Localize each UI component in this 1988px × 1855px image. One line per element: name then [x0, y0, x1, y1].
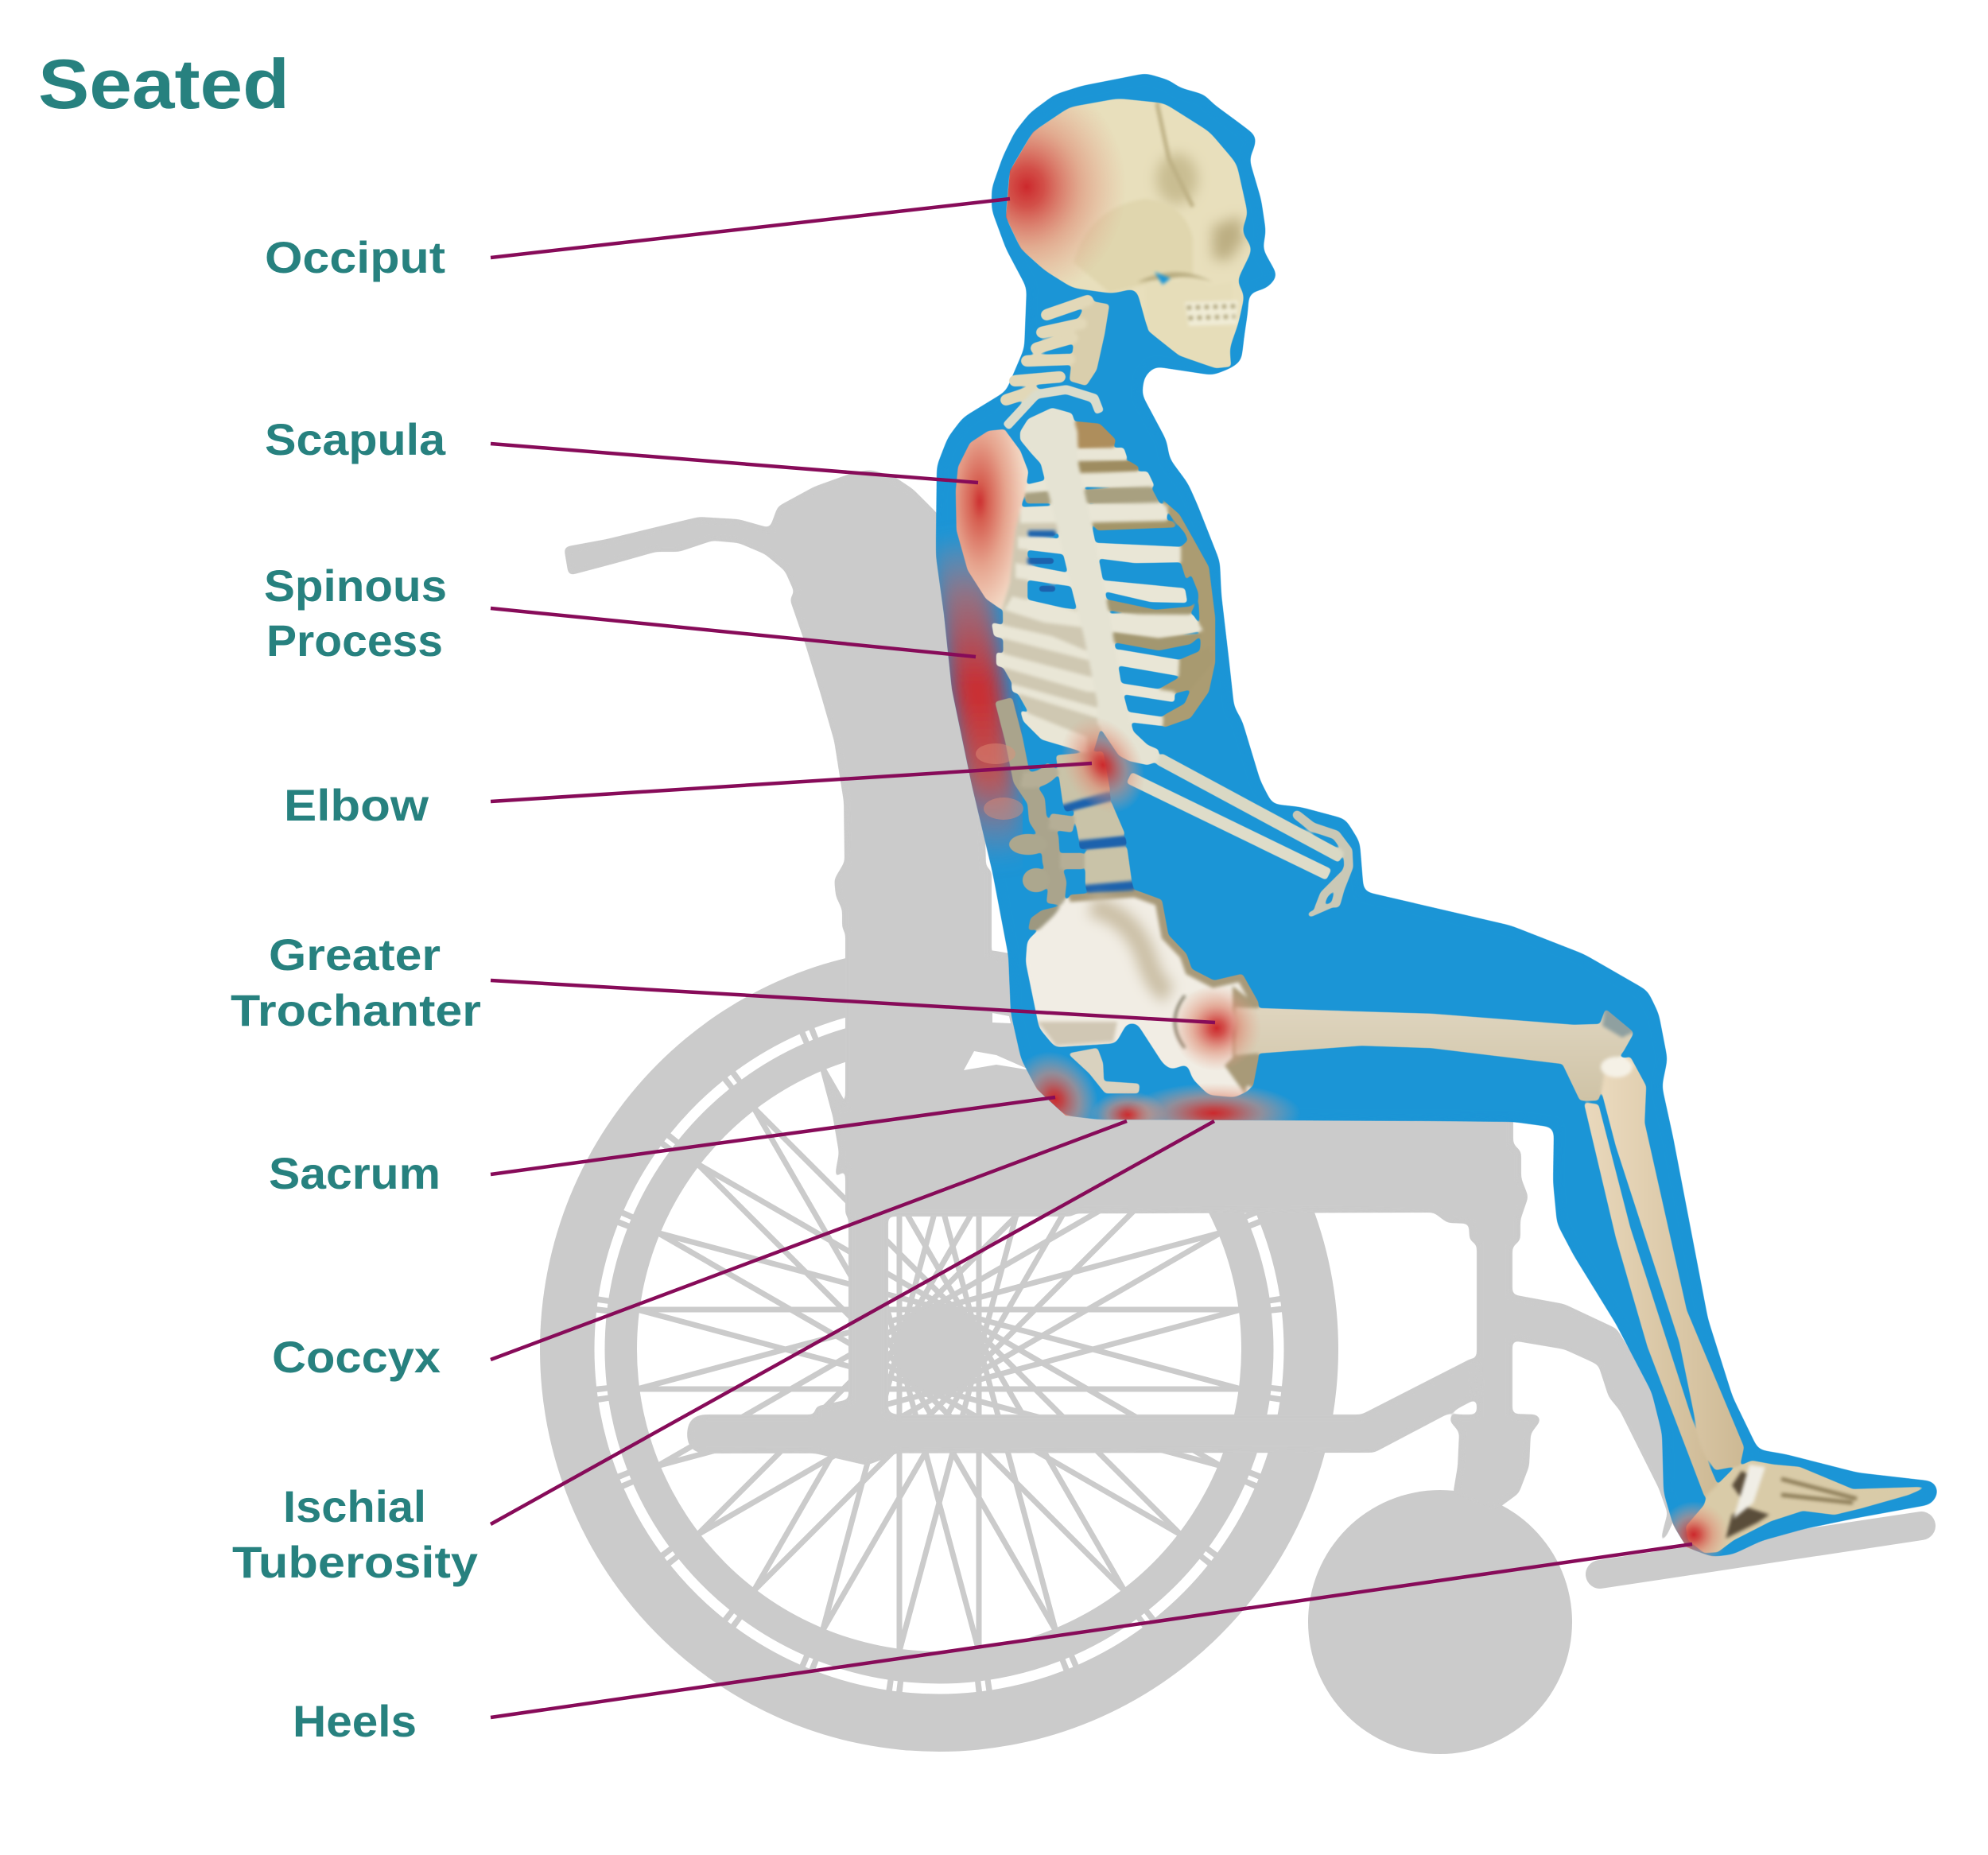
label: coccyx: Coccyx — [272, 1332, 441, 1382]
clavicle — [1006, 390, 1100, 427]
rear wheel — [540, 947, 1338, 1752]
rib bars — [992, 448, 1203, 753]
label: ischial tuberosity — [232, 1481, 478, 1587]
title: Seated — [38, 45, 289, 123]
rib cage — [992, 421, 1215, 753]
label: greater trochanter: Trochanter — [231, 985, 481, 1035]
label: greater trochanter: Greater — [269, 929, 441, 980]
scapula — [956, 429, 1028, 610]
femur — [1235, 1007, 1633, 1100]
label: heels: Heels — [293, 1696, 417, 1746]
posterior shading behind ribs — [1002, 509, 1109, 751]
patella — [1602, 1009, 1633, 1038]
costal cartilage arc — [1140, 468, 1215, 728]
line: heels — [491, 1544, 1692, 1717]
hand — [1297, 815, 1349, 914]
line: scapula — [491, 444, 978, 483]
footrest tube — [1512, 1294, 1678, 1550]
humerus — [1020, 408, 1159, 765]
tibia head — [1601, 1057, 1633, 1077]
label: greater trochanter — [231, 929, 481, 1035]
label: ischial tuberosity: Tuberosity — [232, 1537, 478, 1587]
line: ischial tuberosity — [491, 1121, 1214, 1524]
pelvis — [1026, 892, 1256, 1097]
label: spinous process: Process — [266, 615, 443, 666]
skeleton — [956, 99, 1927, 1553]
seat, post and caster fork — [845, 1113, 1541, 1511]
line: coccyx — [491, 1121, 1127, 1360]
line: occiput — [491, 199, 1010, 258]
label: occiput: Occiput — [265, 232, 445, 282]
spinous process pressure zone — [959, 541, 999, 859]
crossbar clamp — [815, 1399, 899, 1465]
pressure point: elbow — [1044, 702, 1162, 828]
pressure points: sacrum, coccyx, ischial tuberosity, heel — [995, 1035, 1729, 1568]
fibula — [1584, 1103, 1719, 1497]
spinal process highlights — [976, 743, 1023, 820]
label: spinous process — [264, 561, 447, 666]
cervical spine — [1006, 301, 1109, 400]
line: greater trochanter — [491, 980, 1215, 1023]
leader lines — [491, 199, 1692, 1717]
line: elbow — [491, 763, 1092, 801]
labels — [231, 232, 481, 1746]
white gaps in seat — [964, 1013, 1031, 1070]
wheelchair silhouette — [540, 470, 1921, 1754]
crossbar — [687, 1356, 1477, 1453]
chair back and push handle — [564, 470, 1074, 1217]
skull — [1006, 99, 1252, 368]
label: ischial tuberosity: Ischial — [283, 1481, 426, 1531]
pressure point: greater trochanter — [1172, 985, 1261, 1071]
lumbar spine — [1004, 700, 1134, 930]
line: sacrum — [491, 1097, 1055, 1174]
wedge beside chair back — [825, 1069, 845, 1183]
label: scapula: Scapula — [265, 414, 446, 464]
footplate — [1600, 1526, 1921, 1574]
caster wheel — [1308, 1490, 1572, 1754]
forearm bones — [1129, 759, 1342, 875]
dark blue intercostal bars — [1027, 530, 1055, 592]
tibia — [1602, 1057, 1744, 1470]
label: spinous process: Spinous — [264, 561, 447, 611]
blue body silhouette — [936, 73, 1939, 1557]
chair frame — [564, 470, 1678, 1550]
pressure point: occiput — [1006, 106, 1117, 280]
label: sacrum: Sacrum — [269, 1148, 441, 1198]
foot — [1686, 1461, 1927, 1553]
line: spinous process — [491, 608, 976, 657]
label: elbow: Elbow — [284, 780, 429, 830]
